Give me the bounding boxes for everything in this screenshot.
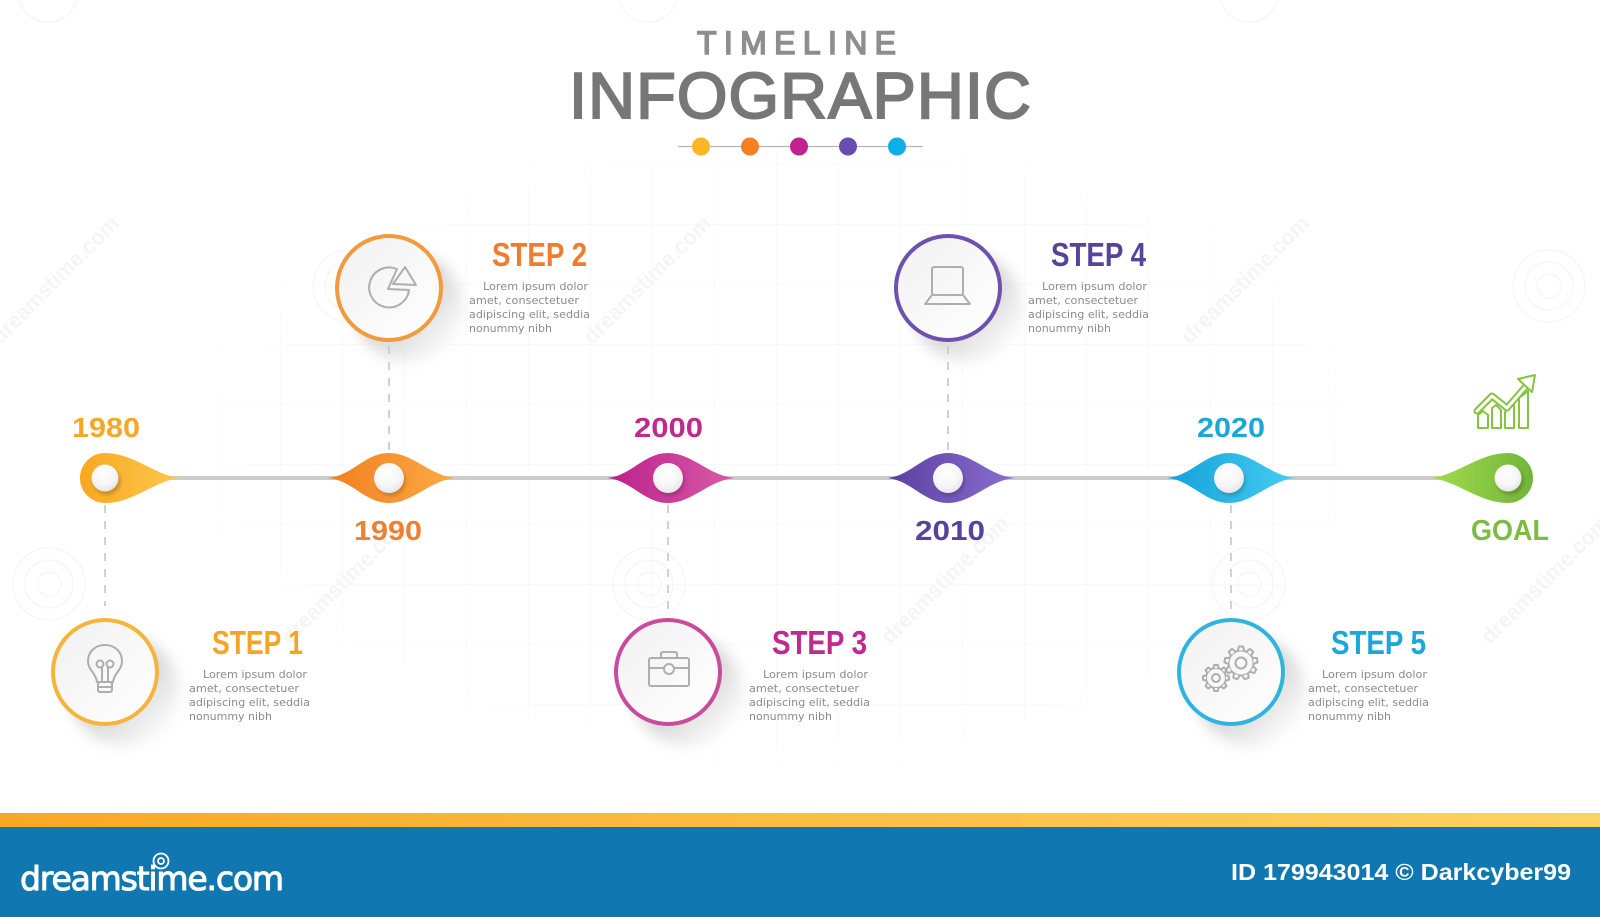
marker: 2020 [1167,453,1296,503]
body: step 3: adipiscing elit, seddia [749,696,870,709]
heading: step 2: STEP 2 [492,236,587,273]
body: step 2: amet, consectetuer [469,294,579,307]
icon: laptop [925,267,970,304]
year: 1980: 1980 [72,412,140,443]
body: step 2: adipiscing elit, seddia [469,308,590,321]
icon: growth chart [1477,375,1535,428]
body: step 5: Lorem ipsum dolor [1322,668,1427,681]
circle: step 3 [616,620,742,746]
icon: logo spiral [154,854,168,868]
watermark: dreamstime.com [1176,211,1314,349]
circle: step 4 [896,236,1022,362]
panel: step 2 [337,236,590,362]
marker: 1990 [328,453,456,503]
panel: step 1 [53,620,310,746]
body: step 5: amet, consectetuer [1308,682,1418,695]
watermark [0,0,1600,649]
connector: step 5 [1230,505,1232,610]
body: step 1: nonummy nibh [189,710,272,723]
year: 2020: 2020 [1197,412,1265,443]
title divider dots [678,138,923,156]
icon: light bulb [88,645,122,692]
panel: step 4 [896,236,1149,362]
icon: gears [1203,646,1258,691]
year: 2010: 2010 [915,515,985,546]
body: step 4: Lorem ipsum dolor [1042,280,1147,293]
connector: step 2 [388,346,390,452]
panel: step 5 [1179,620,1429,746]
body: step 1: amet, consectetuer [189,682,299,695]
panel: step 3 [616,620,870,746]
body: step 2: nonummy nibh [469,322,552,335]
icon: briefcase [649,652,689,686]
connector: step 1 [104,505,106,606]
body: step 3: nonummy nibh [749,710,832,723]
heading: step 5: STEP 5 [1331,624,1426,661]
marker: goal [1430,453,1533,503]
footer bar [0,827,1600,917]
year: 1990: 1990 [354,515,422,546]
marker: 2010 [887,453,1015,503]
heading: infographic: INFOGRAPHIC [569,59,1031,132]
body: step 5 [1308,668,1429,723]
body: step 3: Lorem ipsum dolor [763,668,868,681]
watermark: dreamstime.com [578,211,716,349]
title [569,25,1031,132]
logo text: dreamstime.com [20,859,284,898]
year: 2000: 2000 [634,412,703,443]
circle: step 1 [53,620,179,746]
heading: step 3: STEP 3 [772,624,867,661]
heading: timeline: TIMELINE [697,25,896,61]
heading: step 1: STEP 1 [212,624,303,661]
body: step 4: adipiscing elit, seddia [1028,308,1149,321]
body: step 2 [469,280,590,335]
body: step 5: adipiscing elit, seddia [1308,696,1429,709]
body: step 3: amet, consectetuer [749,682,859,695]
circle: step 2 [337,236,463,362]
connector: step 4 [947,346,949,452]
body: step 5: nonummy nibh [1308,710,1391,723]
background grid [260,168,1320,732]
icon: pie chart [369,267,416,307]
body: step 4 [1028,280,1149,335]
body: step 1 [189,668,310,723]
marker: 1980 [80,453,181,503]
label: goal: GOAL [1471,515,1549,547]
heading: step 4: STEP 4 [1051,236,1147,273]
body: step 2: Lorem ipsum dolor [483,280,588,293]
watermark: dreamstime.com [276,511,414,649]
body: step 1: Lorem ipsum dolor [203,668,307,681]
body: step 1: adipiscing elit, seddia [189,696,310,709]
body: step 4: nonummy nibh [1028,322,1111,335]
connector: step 3 [667,505,669,610]
body: step 3 [749,668,870,723]
watermark: dreamstime.com [876,511,1014,649]
marker: 2000 [607,453,735,503]
timeline axis [170,476,1440,480]
credit text: ID 179943014 © Darkcyber99 [1231,859,1571,885]
body: step 4: amet, consectetuer [1028,294,1138,307]
orange band [0,813,1600,827]
circle: step 5 [1179,620,1305,746]
